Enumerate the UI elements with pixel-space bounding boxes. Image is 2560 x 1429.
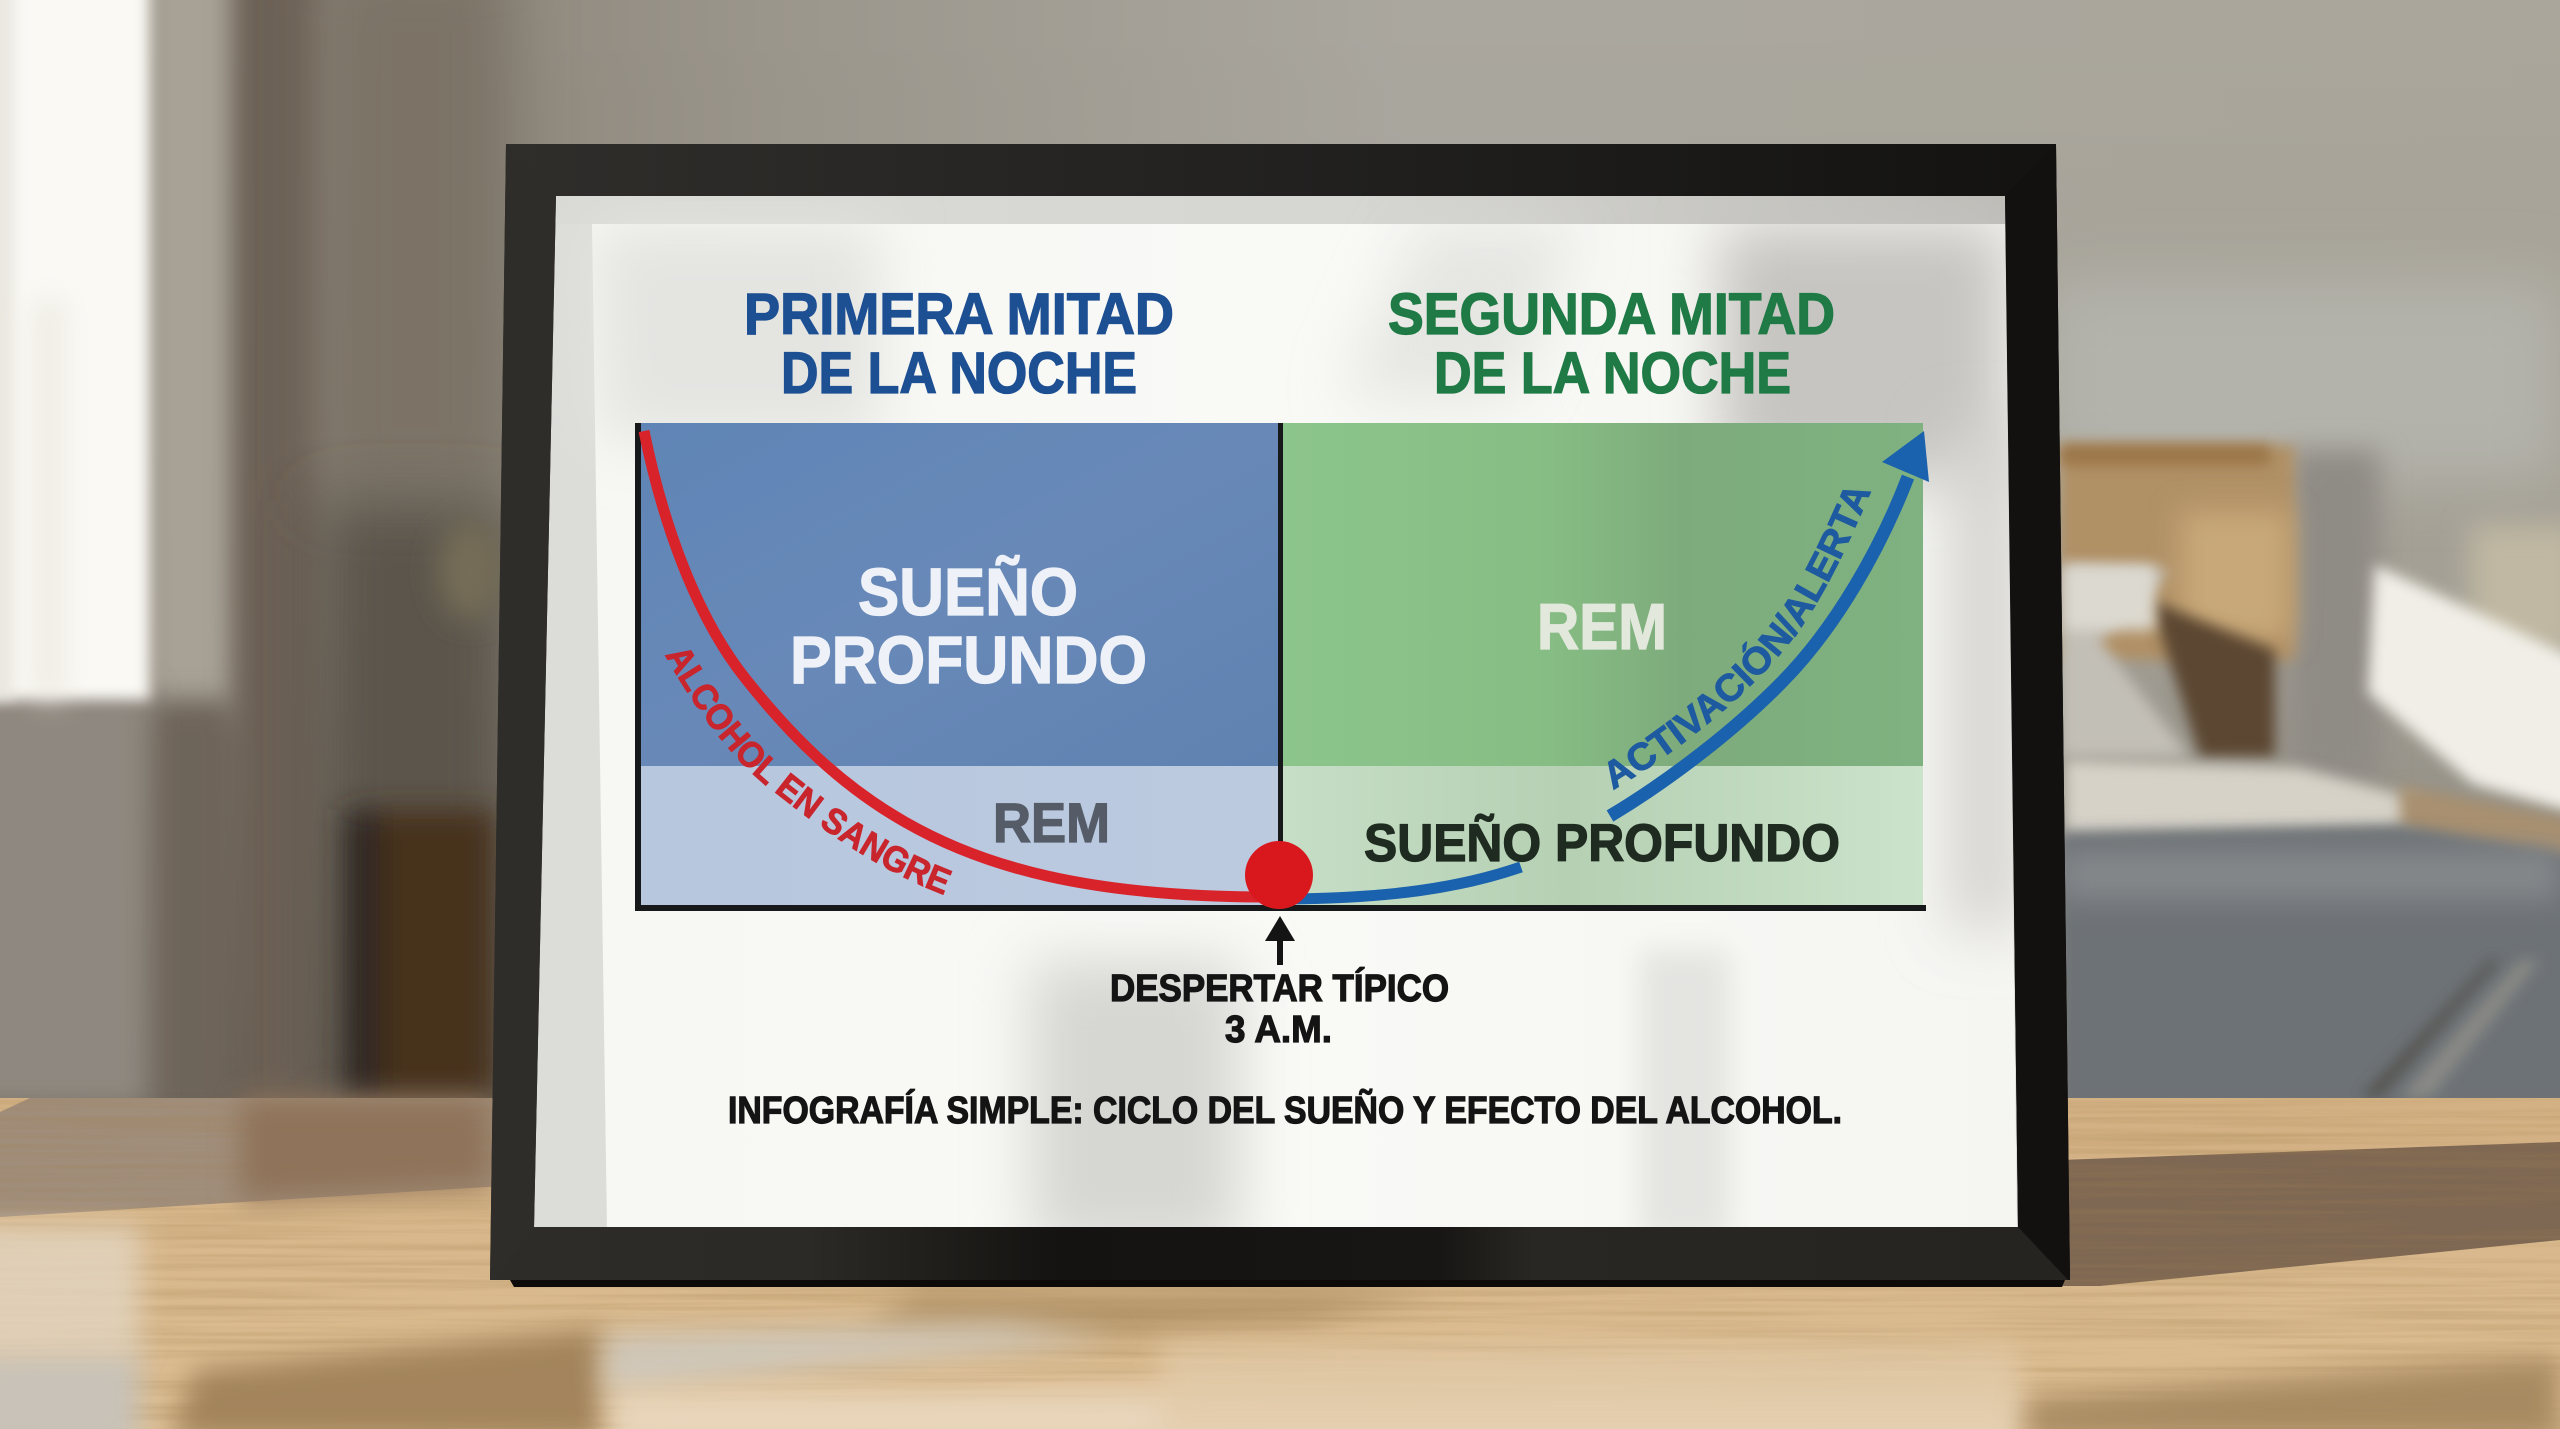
picture frame bbox=[490, 144, 2070, 1287]
heading: segunda mitad de la noche: DE LA NOCHE bbox=[1434, 341, 1791, 406]
background: light and shadow on the table bbox=[0, 1098, 2560, 1429]
label: deep sleep, second half: SUEÑO PROFUNDO bbox=[1364, 813, 1840, 873]
heading: segunda mitad de la noche: SEGUNDA MITAD bbox=[1388, 282, 1835, 347]
background: window and curtains bbox=[0, 0, 510, 1120]
heading: primera mitad de la noche: DE LA NOCHE bbox=[781, 341, 1137, 406]
panel: first half of the night bbox=[641, 423, 1278, 906]
label: rem, second half: REM bbox=[1537, 590, 1667, 663]
label: deep sleep bbox=[790, 555, 1147, 698]
chart axes bbox=[635, 423, 1926, 911]
marker: red dot at 3 a.m. bbox=[1245, 841, 1313, 909]
label: activacion/alerta: ACTIVACIÓN/ALERTA bbox=[1608, 490, 1872, 790]
label: deep sleep: PROFUNDO bbox=[790, 623, 1147, 698]
label: deep sleep: SUEÑO bbox=[858, 555, 1078, 630]
background: blurred bedroom wall bbox=[0, 0, 2560, 1100]
label: typical wake-up: 3 A.M. bbox=[1225, 1009, 1332, 1051]
label: rem, first half: REM bbox=[993, 791, 1110, 854]
heading: primera mitad de la noche: PRIMERA MITAD bbox=[744, 282, 1174, 347]
background: blurred bed bbox=[2060, 445, 2560, 1110]
label: typical wake-up: DESPERTAR TÍPICO bbox=[1110, 966, 1449, 1010]
background: bedside table bbox=[345, 520, 502, 1100]
curve: blood alcohol bbox=[644, 431, 1260, 897]
arrow: pointing to marker bbox=[1265, 916, 1295, 965]
curve: activation arrow bbox=[1290, 431, 1929, 899]
heading: primera mitad de la noche bbox=[744, 282, 1174, 406]
background: wooden tabletop bbox=[0, 1098, 2560, 1429]
matted poster bbox=[534, 196, 2020, 1250]
panel: second half of the night bbox=[1283, 423, 1923, 906]
caption: INFOGRAFÍA SIMPLE: CICLO DEL SUEÑO Y EFECTO DEL ALCOHOL. bbox=[728, 1088, 1842, 1132]
label: typical wake-up bbox=[1110, 966, 1449, 1051]
heading: segunda mitad de la noche bbox=[1388, 282, 1835, 406]
label: alcohol en sangre: ALCOHOL EN SANGRE bbox=[664, 650, 952, 896]
